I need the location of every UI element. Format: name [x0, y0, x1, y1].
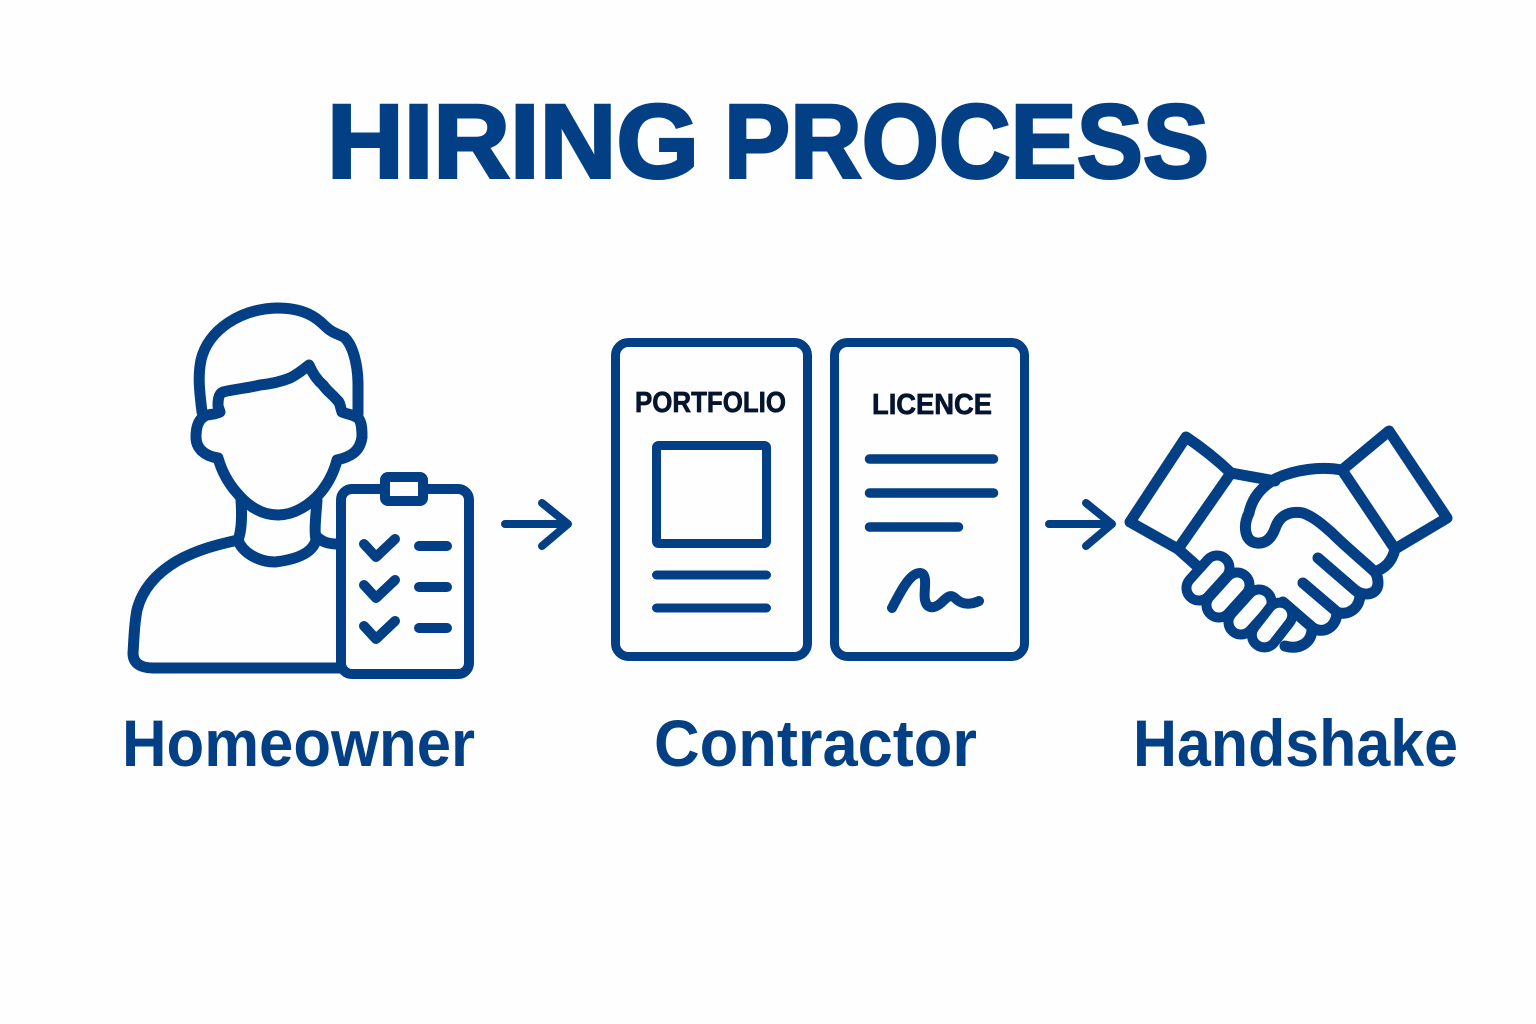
arrow: contractor to handshake — [1049, 503, 1112, 546]
icon: homeowner with clipboard — [133, 308, 469, 674]
finger 3 — [1283, 602, 1337, 630]
right hand and thumb — [1245, 468, 1375, 572]
label: contractor: Contractor — [654, 706, 977, 780]
neck and shoulders — [133, 500, 340, 668]
knuckles — [1181, 550, 1297, 652]
clipboard clip — [385, 477, 423, 501]
licence text lines — [870, 459, 994, 527]
title: HIRING — [327, 84, 699, 200]
finger 1 — [1318, 558, 1378, 594]
clipboard board — [341, 489, 469, 674]
finger 2 — [1303, 583, 1360, 613]
right wrist — [1375, 549, 1395, 572]
far shoulder — [316, 536, 338, 544]
signature — [892, 573, 979, 608]
icon: licence document — [834, 342, 1024, 656]
collar — [238, 500, 317, 562]
label: handshake: Handshake — [1133, 706, 1458, 780]
licence label: LICENCE — [872, 389, 992, 421]
arrow: homeowner to contractor — [505, 503, 568, 546]
icon: portfolio document — [616, 342, 808, 656]
title: PROCESS — [724, 84, 1209, 200]
checklist row 3 — [364, 621, 447, 639]
right cuff — [1342, 431, 1447, 549]
checklist row 1 — [364, 539, 447, 557]
left cuff — [1130, 437, 1231, 549]
face and ears — [196, 365, 362, 515]
text lines — [656, 575, 766, 608]
label: homeowner: Homeowner — [122, 706, 475, 780]
title — [327, 84, 1209, 200]
finger 4 — [1285, 630, 1312, 647]
checklist row 2 — [364, 580, 447, 598]
hair outline — [199, 308, 358, 414]
portfolio label: PORTFOLIO — [635, 387, 786, 419]
left hand edges — [1178, 473, 1275, 566]
icon: handshake — [1130, 431, 1447, 652]
image placeholder — [656, 446, 766, 544]
